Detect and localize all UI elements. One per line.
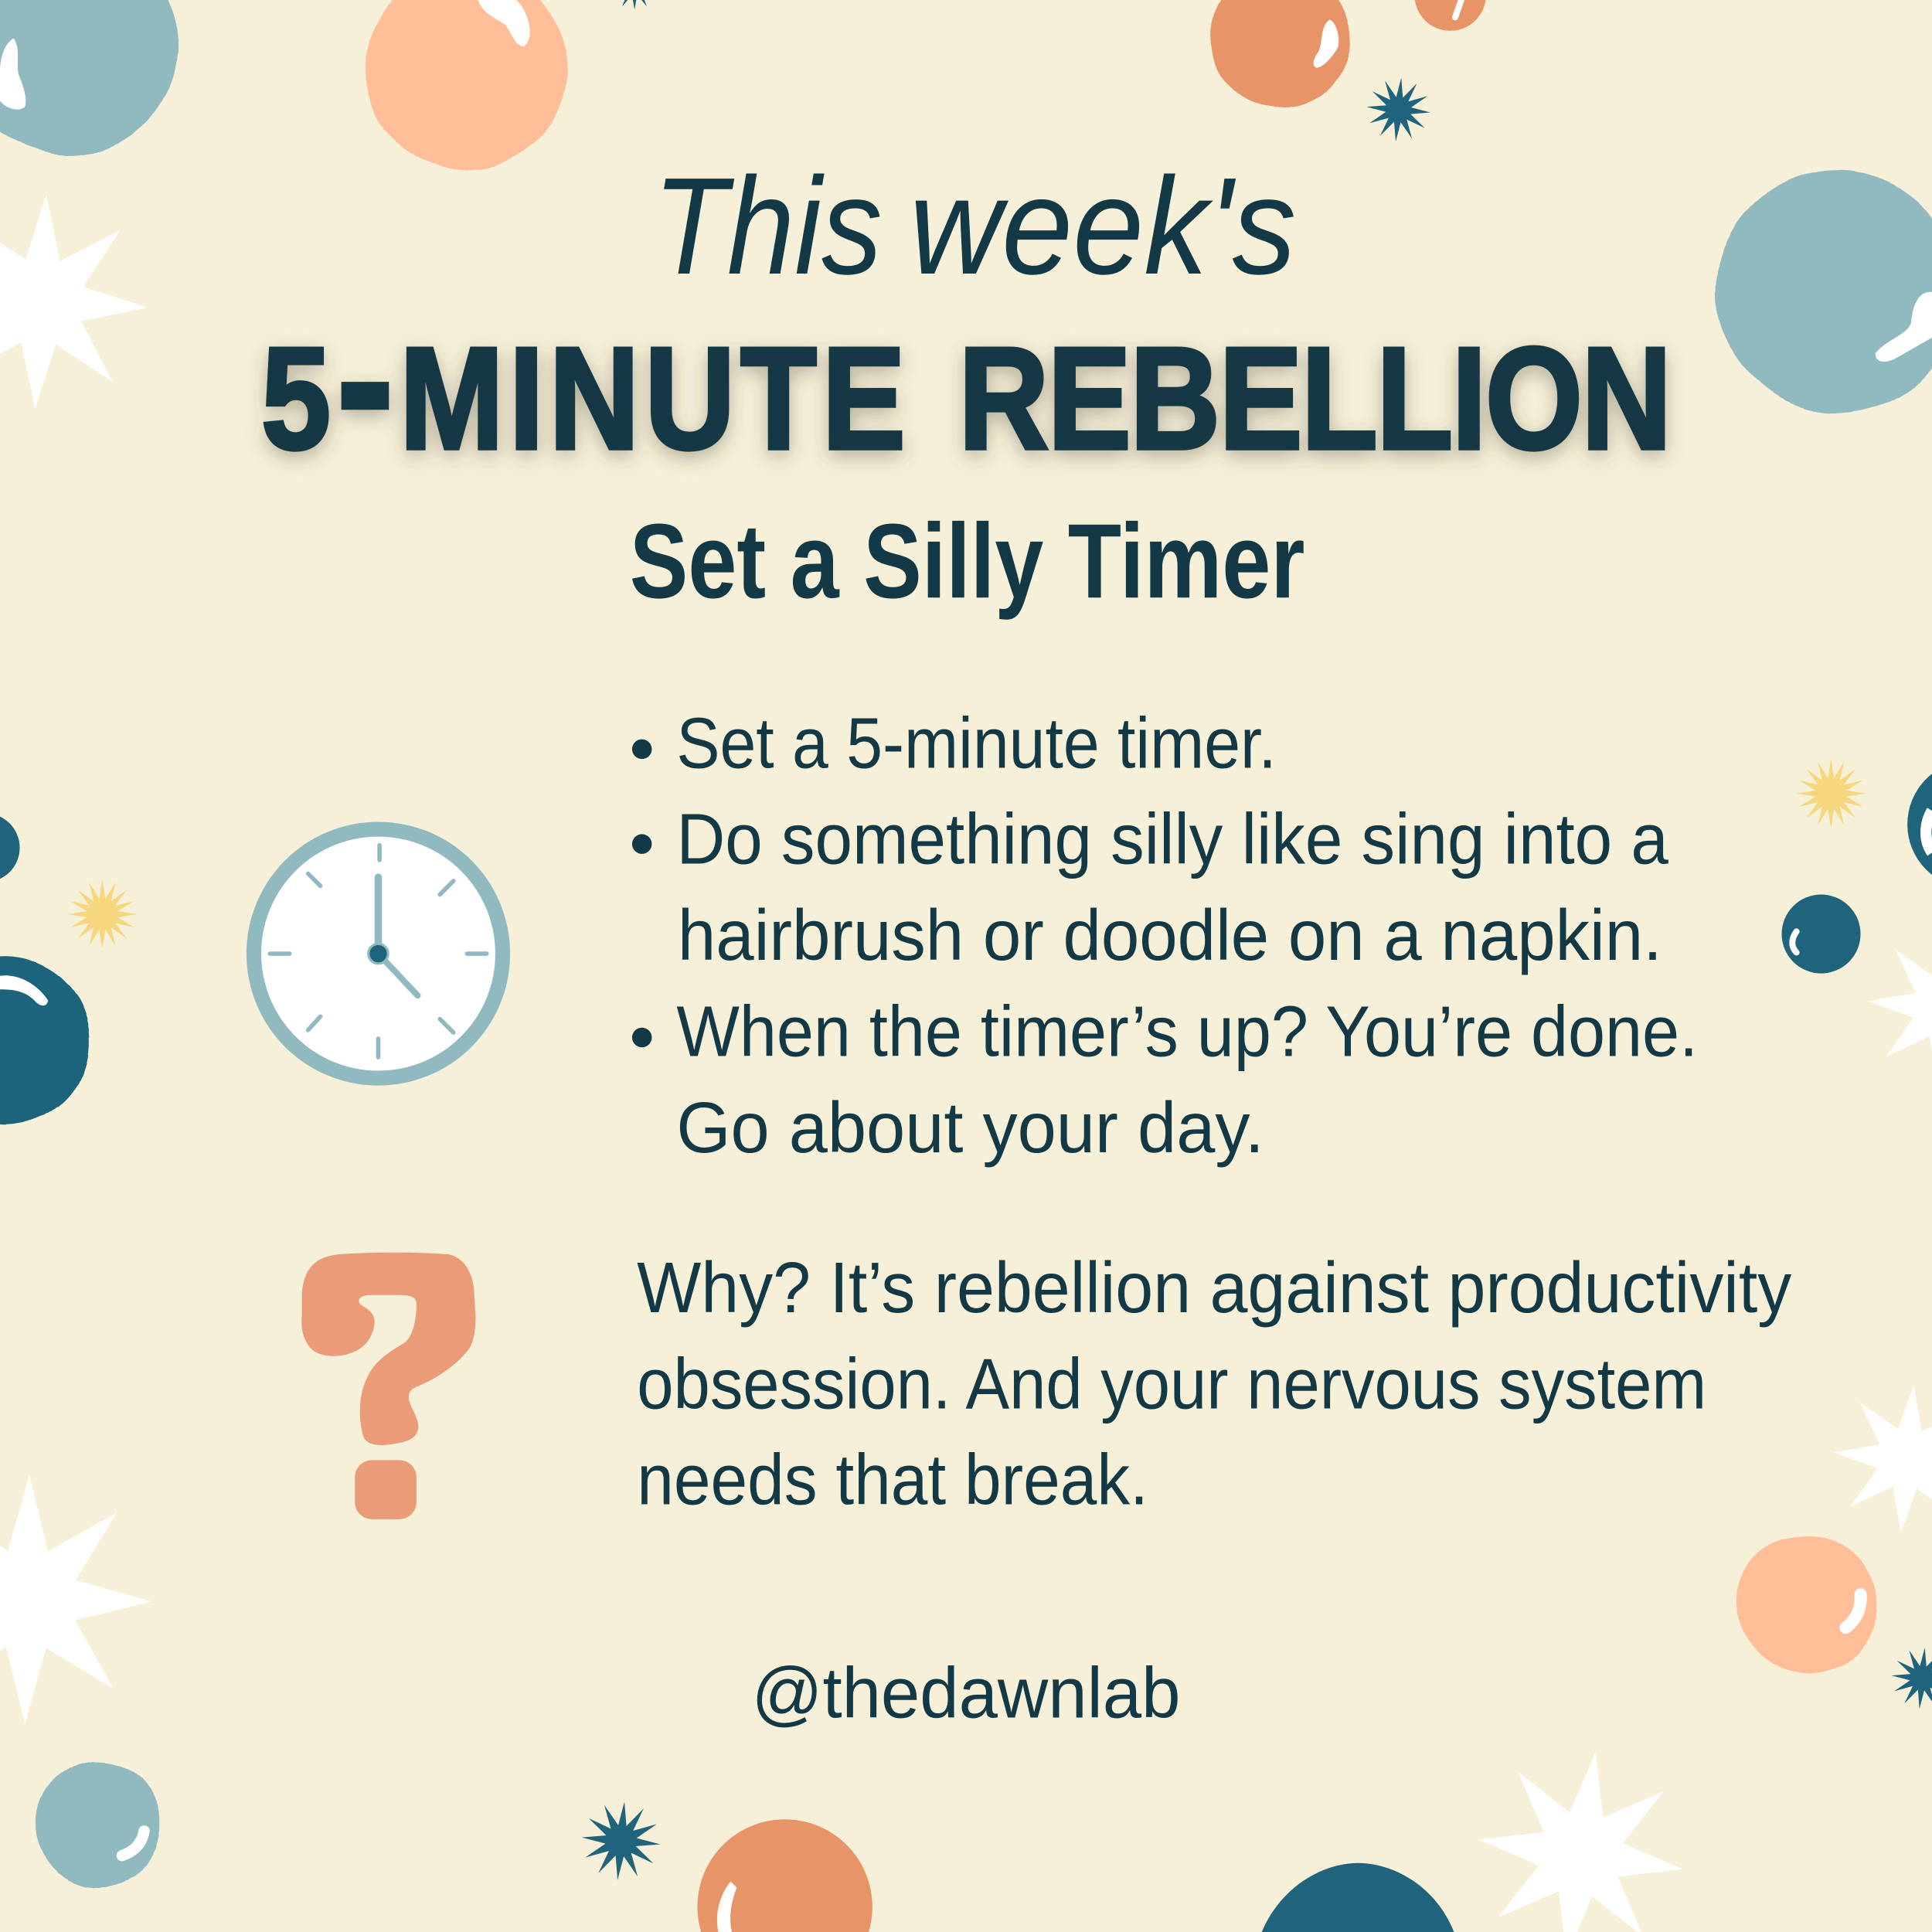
explanation paragraph: needs that break. [637,1440,1148,1520]
bullet marker 1 [632,740,651,759]
title script: week's [910,148,1296,303]
explanation paragraph: obsession. And your nervous system [637,1343,1706,1423]
bubble: teal bottom left [36,1760,162,1886]
explanation paragraph: Why? It’s rebellion against productivity [637,1247,1792,1328]
star: white lower left [0,1473,154,1726]
star: dark bottom [581,1802,660,1880]
clock hands [378,877,417,995]
star: dark top right [1366,77,1430,142]
bubble: dark bottom [1262,1863,1454,1932]
bubble: dark left small [0,813,20,883]
icon: clock [253,829,503,1078]
bubble: peach top [365,0,566,170]
bubble: dark left [0,956,90,1126]
bullet list [632,702,1698,1168]
bubble: orange bottom [697,1819,872,1932]
bubble: small orange top [1414,0,1486,31]
title main: 5-MINUTE [261,264,906,492]
bubble: orange top [1210,0,1350,108]
bubble: teal right [1716,172,1932,413]
star: white right lower [1834,1385,1932,1532]
star: dark top [622,0,647,10]
bullet list: When the timer’s up? You’re done. [676,991,1698,1071]
title main: REBELLION [958,318,1672,480]
explanation paragraph [637,1247,1792,1520]
bullet list: hairbrush or doodle on a napkin. [678,895,1662,975]
title script [653,148,1296,303]
star: white right [1869,949,1932,1057]
bubble: dark right edge [1907,774,1932,875]
clock face [253,829,503,1078]
star: dark right [1892,1648,1932,1709]
bubble: peach right [1737,1534,1878,1675]
star: white bottom right [1478,1752,1683,1932]
bubble: dark right [1781,895,1861,974]
star: yellow right [1797,759,1866,828]
bubble: teal top left [0,0,178,155]
title main [261,264,1672,492]
clock hub [369,944,388,964]
bullet list: Set a 5-minute timer. [676,702,1277,783]
icon: question mark [301,1253,475,1519]
subtitle: Set a Silly Timer [630,502,1304,621]
title script: This [653,148,883,303]
star: yellow left [68,879,136,949]
handle: @thedawnlab [752,1653,1180,1733]
bullet list: Do something silly like sing into a [676,799,1668,879]
clock ticks [270,845,487,1057]
bullet list: Go about your day. [676,1087,1264,1168]
star: white top left [0,189,153,414]
